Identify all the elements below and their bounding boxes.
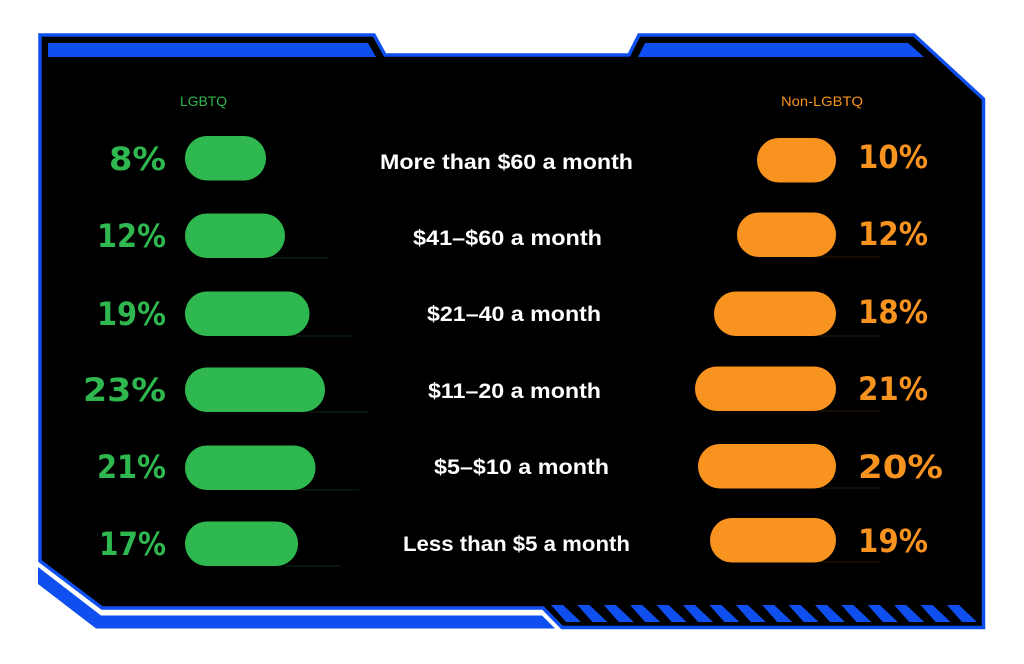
row: $41–$60 a month: $41–$60 a month [413, 227, 602, 250]
heading: Non-LGBTQ: Non-LGBTQ [781, 93, 863, 109]
row: $5–$10 a month: 21% [97, 448, 166, 486]
row: $21–40 a month: 19% [97, 295, 166, 333]
row: $11–20 a month: 21% [858, 370, 928, 408]
row: More than $60 a month: 8% [109, 140, 166, 178]
row: $41–$60 a month [97, 212, 928, 258]
row: $5–$10 a month: 20% [858, 448, 943, 486]
row: More than $60 a month [109, 136, 928, 182]
row: More than $60 a month: 10% [858, 138, 928, 176]
row: $41–$60 a month: 12% [97, 217, 166, 255]
row: Less than $5 a month [99, 518, 928, 566]
row: $21–40 a month [97, 292, 928, 336]
bottom left blue band [38, 567, 555, 628]
row: $11–20 a month [83, 366, 928, 412]
bottom right hazard stripes [551, 605, 977, 622]
row: Less than $5 a month: Less than $5 a month [403, 533, 630, 556]
row: $21–40 a month: $21–40 a month [427, 303, 601, 326]
top left blue bar [48, 43, 376, 57]
row: Less than $5 a month: 17% [99, 525, 166, 563]
row: Less than $5 a month: 19% [858, 522, 928, 560]
row: $41–$60 a month: 12% [858, 215, 928, 253]
row: More than $60 a month: More than $60 a month [380, 151, 633, 174]
row: $11–20 a month: 23% [83, 371, 166, 409]
heading: LGBTQ: LGBTQ [180, 93, 227, 109]
row: $5–$10 a month [97, 444, 943, 490]
row: $11–20 a month: $11–20 a month [428, 380, 601, 403]
top right blue bar [638, 43, 924, 57]
row: $5–$10 a month: $5–$10 a month [434, 456, 609, 479]
row: $21–40 a month: 18% [858, 293, 928, 331]
